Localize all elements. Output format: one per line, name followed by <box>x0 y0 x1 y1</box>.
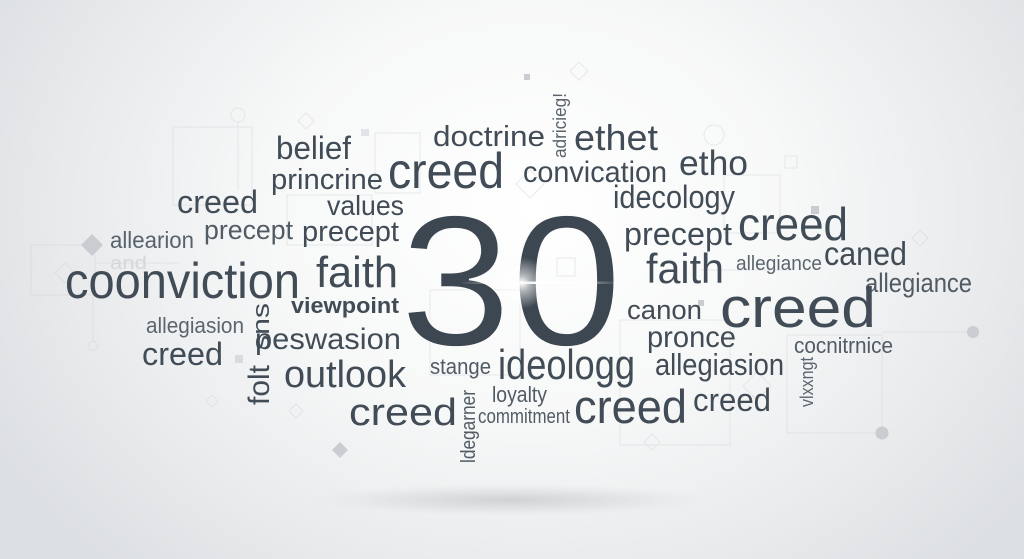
word cloud: bottom centre <box>430 341 687 463</box>
word: folt, vertical: folt <box>243 364 276 405</box>
word: precept: precept <box>204 215 293 245</box>
word: ldegarner, vertical: ldegarner <box>458 390 480 463</box>
word cloud: right <box>613 144 972 418</box>
lens flare on number <box>460 257 620 309</box>
word: pronce: pronce <box>647 321 736 354</box>
decorative markers <box>81 74 979 458</box>
word: outlook: outlook <box>284 354 407 396</box>
word: viewpoint: viewpoint <box>291 293 400 318</box>
word: faith: faith <box>316 248 398 297</box>
word cloud: left <box>65 130 457 434</box>
word: adricieg, vertical: adricieg! <box>550 93 570 158</box>
word: allegiasion: allegiasion <box>655 347 784 382</box>
word: creed: creed <box>349 392 457 434</box>
word: belief: belief <box>276 130 351 166</box>
word: creed: creed <box>693 382 771 418</box>
floor shadow <box>310 484 710 516</box>
word: creed: creed <box>142 336 223 372</box>
word: peswasion: peswasion <box>255 323 401 356</box>
word: commitment: commitment <box>478 406 570 428</box>
word: creed: creed <box>720 276 876 340</box>
word: sns, vertical: sns <box>248 303 275 350</box>
word: precept: precept <box>624 216 732 252</box>
word: vlxxngt, vertical: vlxxngt <box>797 357 817 407</box>
word: allearion: allearion <box>110 227 194 253</box>
word: princrine: princrine <box>271 164 383 196</box>
word: loyalty: loyalty <box>492 382 547 407</box>
word: precept: precept <box>302 216 399 248</box>
word: ideologg: ideologg <box>498 341 635 388</box>
word: etho: etho <box>679 144 748 183</box>
word cloud: top centre <box>388 93 667 199</box>
word: caned: caned <box>824 235 907 272</box>
word: allegiance: allegiance <box>736 253 822 275</box>
word: values: values <box>327 190 404 221</box>
word: faith: faith <box>646 245 724 292</box>
word: doctrine: doctrine <box>433 121 545 153</box>
central number 30: 30 <box>400 178 622 385</box>
word: allegiance: allegiance <box>865 268 972 298</box>
word: ethet: ethet <box>574 117 658 158</box>
word: stange: stange <box>430 354 491 379</box>
word: cocnitrnice: cocnitrnice <box>794 333 893 358</box>
word: canon: canon <box>627 295 702 325</box>
word: creed: creed <box>574 380 687 433</box>
word: coonviction: coonviction <box>65 253 300 309</box>
word: allegiasion: allegiasion <box>146 313 244 338</box>
word: and (faint): and <box>110 253 147 273</box>
faint circuit pattern <box>31 62 970 450</box>
word: idecology: idecology <box>613 179 735 215</box>
word: creed: creed <box>738 198 848 250</box>
word: creed: creed <box>388 143 504 199</box>
word: convication: convication <box>523 156 667 189</box>
word: creed: creed <box>177 184 258 220</box>
